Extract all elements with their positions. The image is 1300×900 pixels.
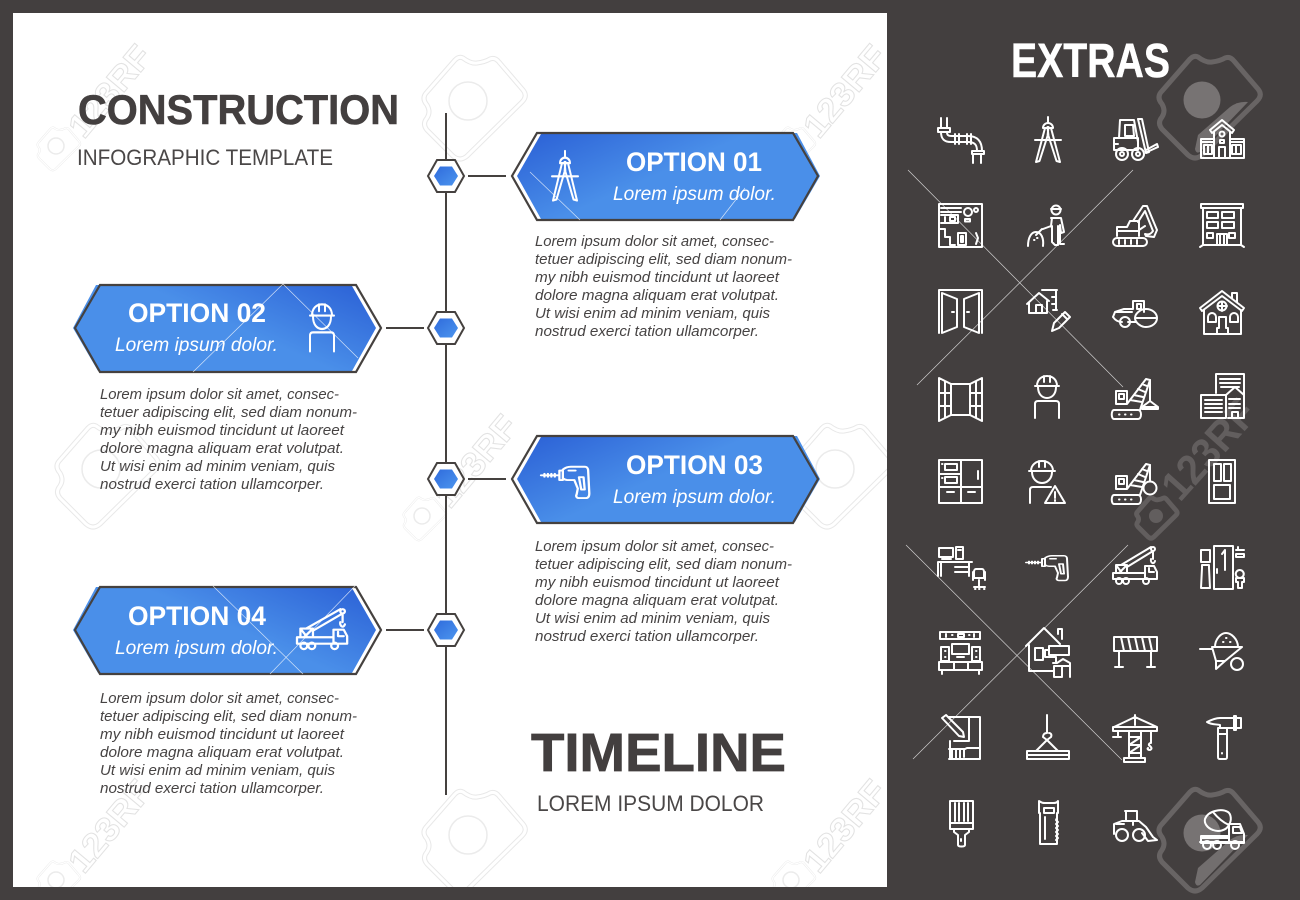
white panel bbox=[13, 13, 887, 887]
icon: power drill bbox=[541, 467, 589, 498]
watermarks on white panel: 123RF bbox=[61, 773, 160, 880]
subheading: lorem ipsum dolor: LOREM IPSUM DOLOR bbox=[537, 791, 764, 816]
watermarks on white panel: 123RF bbox=[427, 408, 526, 515]
text block: option 04 description: nostrud exerci tation ullamcorper. bbox=[100, 780, 324, 797]
icon: house painting bbox=[1026, 628, 1070, 677]
thin diagonal lines on dark panel bbox=[906, 170, 1133, 760]
icon: compass bbox=[1035, 117, 1061, 162]
text block: option 03 description: Lorem ipsum dolor sit amet, consec- bbox=[535, 538, 774, 555]
text block: option 01 description: nostrud exerci tation ullamcorper. bbox=[535, 323, 759, 340]
icon: panel door bbox=[1209, 460, 1235, 503]
title: CONSTRUCTION bbox=[78, 86, 399, 133]
text block: option 02 description bbox=[100, 386, 357, 493]
timeline axis bbox=[386, 113, 506, 795]
panel: option 03: Lorem ipsum dolor. bbox=[613, 486, 776, 508]
panel: option 02: OPTION 02 bbox=[128, 298, 266, 328]
icon: tower crane bbox=[1113, 715, 1157, 762]
icon: tv unit bbox=[939, 632, 982, 674]
icon: drawing compass bbox=[552, 151, 578, 200]
icon: crane truck small bbox=[1113, 547, 1157, 584]
panel: option 04: OPTION 04 bbox=[128, 601, 266, 631]
watermarks on white panel: 123RF bbox=[796, 38, 895, 145]
heading: timeline: TIMELINE bbox=[531, 723, 786, 783]
icon: kitchen cabinets bbox=[939, 460, 982, 503]
icon: excavator bbox=[1113, 206, 1157, 246]
icon: office buildings bbox=[1201, 374, 1244, 418]
text block: option 04 description: tetuer adipiscing elit, sed diam nonum- bbox=[100, 708, 357, 725]
panel: option 01: OPTION 01 bbox=[626, 147, 762, 177]
icon: road barrier bbox=[1114, 637, 1157, 667]
heading: extras: EXTRAS bbox=[1011, 35, 1170, 88]
panel: option 02: Lorem ipsum dolor. bbox=[115, 334, 278, 356]
panel: option 01: Lorem ipsum dolor. bbox=[613, 183, 776, 205]
panel: option 01 bbox=[512, 133, 820, 220]
icon: blueprint bbox=[942, 715, 980, 759]
text block: option 03 description bbox=[535, 538, 792, 645]
icon: wrecking crane bbox=[1112, 464, 1156, 504]
icon: double doors bbox=[939, 290, 982, 333]
text block: option 01 description: tetuer adipiscing elit, sed diam nonum- bbox=[535, 251, 792, 268]
text block: option 04 description: my nibh euismod tincidunt ut laoreet bbox=[100, 726, 345, 743]
text block: option 01 description: my nibh euismod tincidunt ut laoreet bbox=[535, 269, 780, 286]
watermarks on white panel bbox=[38, 38, 895, 900]
text block: option 02 description: dolore magna aliquam erat volutpat. bbox=[100, 440, 344, 457]
icon: house plan with pencil bbox=[1027, 290, 1070, 331]
text block: option 02 description: tetuer adipiscing elit, sed diam nonum- bbox=[100, 404, 357, 421]
text block: option 02 description: Lorem ipsum dolor sit amet, consec- bbox=[100, 386, 339, 403]
text block: option 04 description bbox=[100, 690, 357, 797]
panel: option 04 bbox=[73, 586, 381, 674]
icon: wheelbarrow bbox=[1200, 633, 1243, 670]
text block: option 01 description: Lorem ipsum dolor sit amet, consec- bbox=[535, 233, 774, 250]
subtitle: INFOGRAPHIC TEMPLATE bbox=[77, 145, 333, 170]
watermarks on white panel: 123RF bbox=[796, 773, 895, 880]
icon: crawler crane bbox=[1112, 379, 1158, 419]
text block: option 01 description: dolore magna aliquam erat volutpat. bbox=[535, 287, 779, 304]
icon: crane truck bbox=[297, 609, 347, 649]
icon: open window bbox=[939, 378, 982, 421]
text block: option 03 description: dolore magna aliquam erat volutpat. bbox=[535, 592, 779, 609]
text block: option 04 description: Lorem ipsum dolor sit amet, consec- bbox=[100, 690, 339, 707]
text block: option 03 description: Ut wisi enim ad minim veniam, quis bbox=[535, 610, 770, 627]
icon: house bbox=[1200, 291, 1244, 334]
icon: crane hook with beam bbox=[1027, 715, 1069, 759]
icon: digging worker bbox=[1028, 206, 1064, 246]
icon: forklift bbox=[1114, 119, 1158, 160]
text block: option 02 description: Ut wisi enim ad minim veniam, quis bbox=[100, 458, 335, 475]
icon: school bbox=[1201, 120, 1244, 158]
icon: paint brush bbox=[950, 801, 973, 846]
panel: option 04: Lorem ipsum dolor. bbox=[115, 637, 278, 659]
icon: hammer bbox=[1207, 716, 1241, 759]
text block: option 04 description: Ut wisi enim ad minim veniam, quis bbox=[100, 762, 335, 779]
watermarks on white panel: 123RF bbox=[61, 38, 160, 145]
text block: option 03 description: tetuer adipiscing elit, sed diam nonum- bbox=[535, 556, 792, 573]
watermarks on dark panel: 123RF bbox=[1152, 390, 1266, 509]
panel: option 02 bbox=[73, 284, 381, 372]
panel: option 03: OPTION 03 bbox=[626, 450, 763, 480]
icon: pipe bbox=[938, 118, 984, 163]
icon: wheel loader bbox=[1114, 811, 1157, 841]
watermarks on dark panel bbox=[1137, 56, 1266, 891]
text block: option 03 description: nostrud exerci tation ullamcorper. bbox=[535, 628, 759, 645]
icon: worker with warning sign bbox=[1029, 461, 1065, 503]
text block: option 02 description: nostrud exerci tation ullamcorper. bbox=[100, 476, 324, 493]
panel: option 03 bbox=[512, 436, 820, 523]
icon: desk and chair bbox=[938, 547, 985, 589]
icon: bathroom set bbox=[1201, 546, 1244, 589]
icon: apartment block bbox=[1200, 204, 1244, 247]
icon: cement truck bbox=[1200, 810, 1244, 849]
text block: option 04 description: dolore magna aliquam erat volutpat. bbox=[100, 744, 344, 761]
text block: option 01 description: Ut wisi enim ad minim veniam, quis bbox=[535, 305, 770, 322]
icon: worker bbox=[1035, 376, 1059, 418]
icon: worker with helmet bbox=[310, 304, 334, 351]
icon: drill bbox=[1026, 556, 1068, 580]
text block: option 01 description bbox=[535, 233, 792, 340]
text block: option 02 description: my nibh euismod tincidunt ut laoreet bbox=[100, 422, 345, 439]
icon: floor plan bbox=[939, 204, 982, 247]
text block: option 03 description: my nibh euismod tincidunt ut laoreet bbox=[535, 574, 780, 591]
panel: extras icon grid bbox=[938, 117, 1244, 849]
icon: hand saw bbox=[1039, 801, 1058, 844]
icon: road roller bbox=[1113, 301, 1157, 327]
